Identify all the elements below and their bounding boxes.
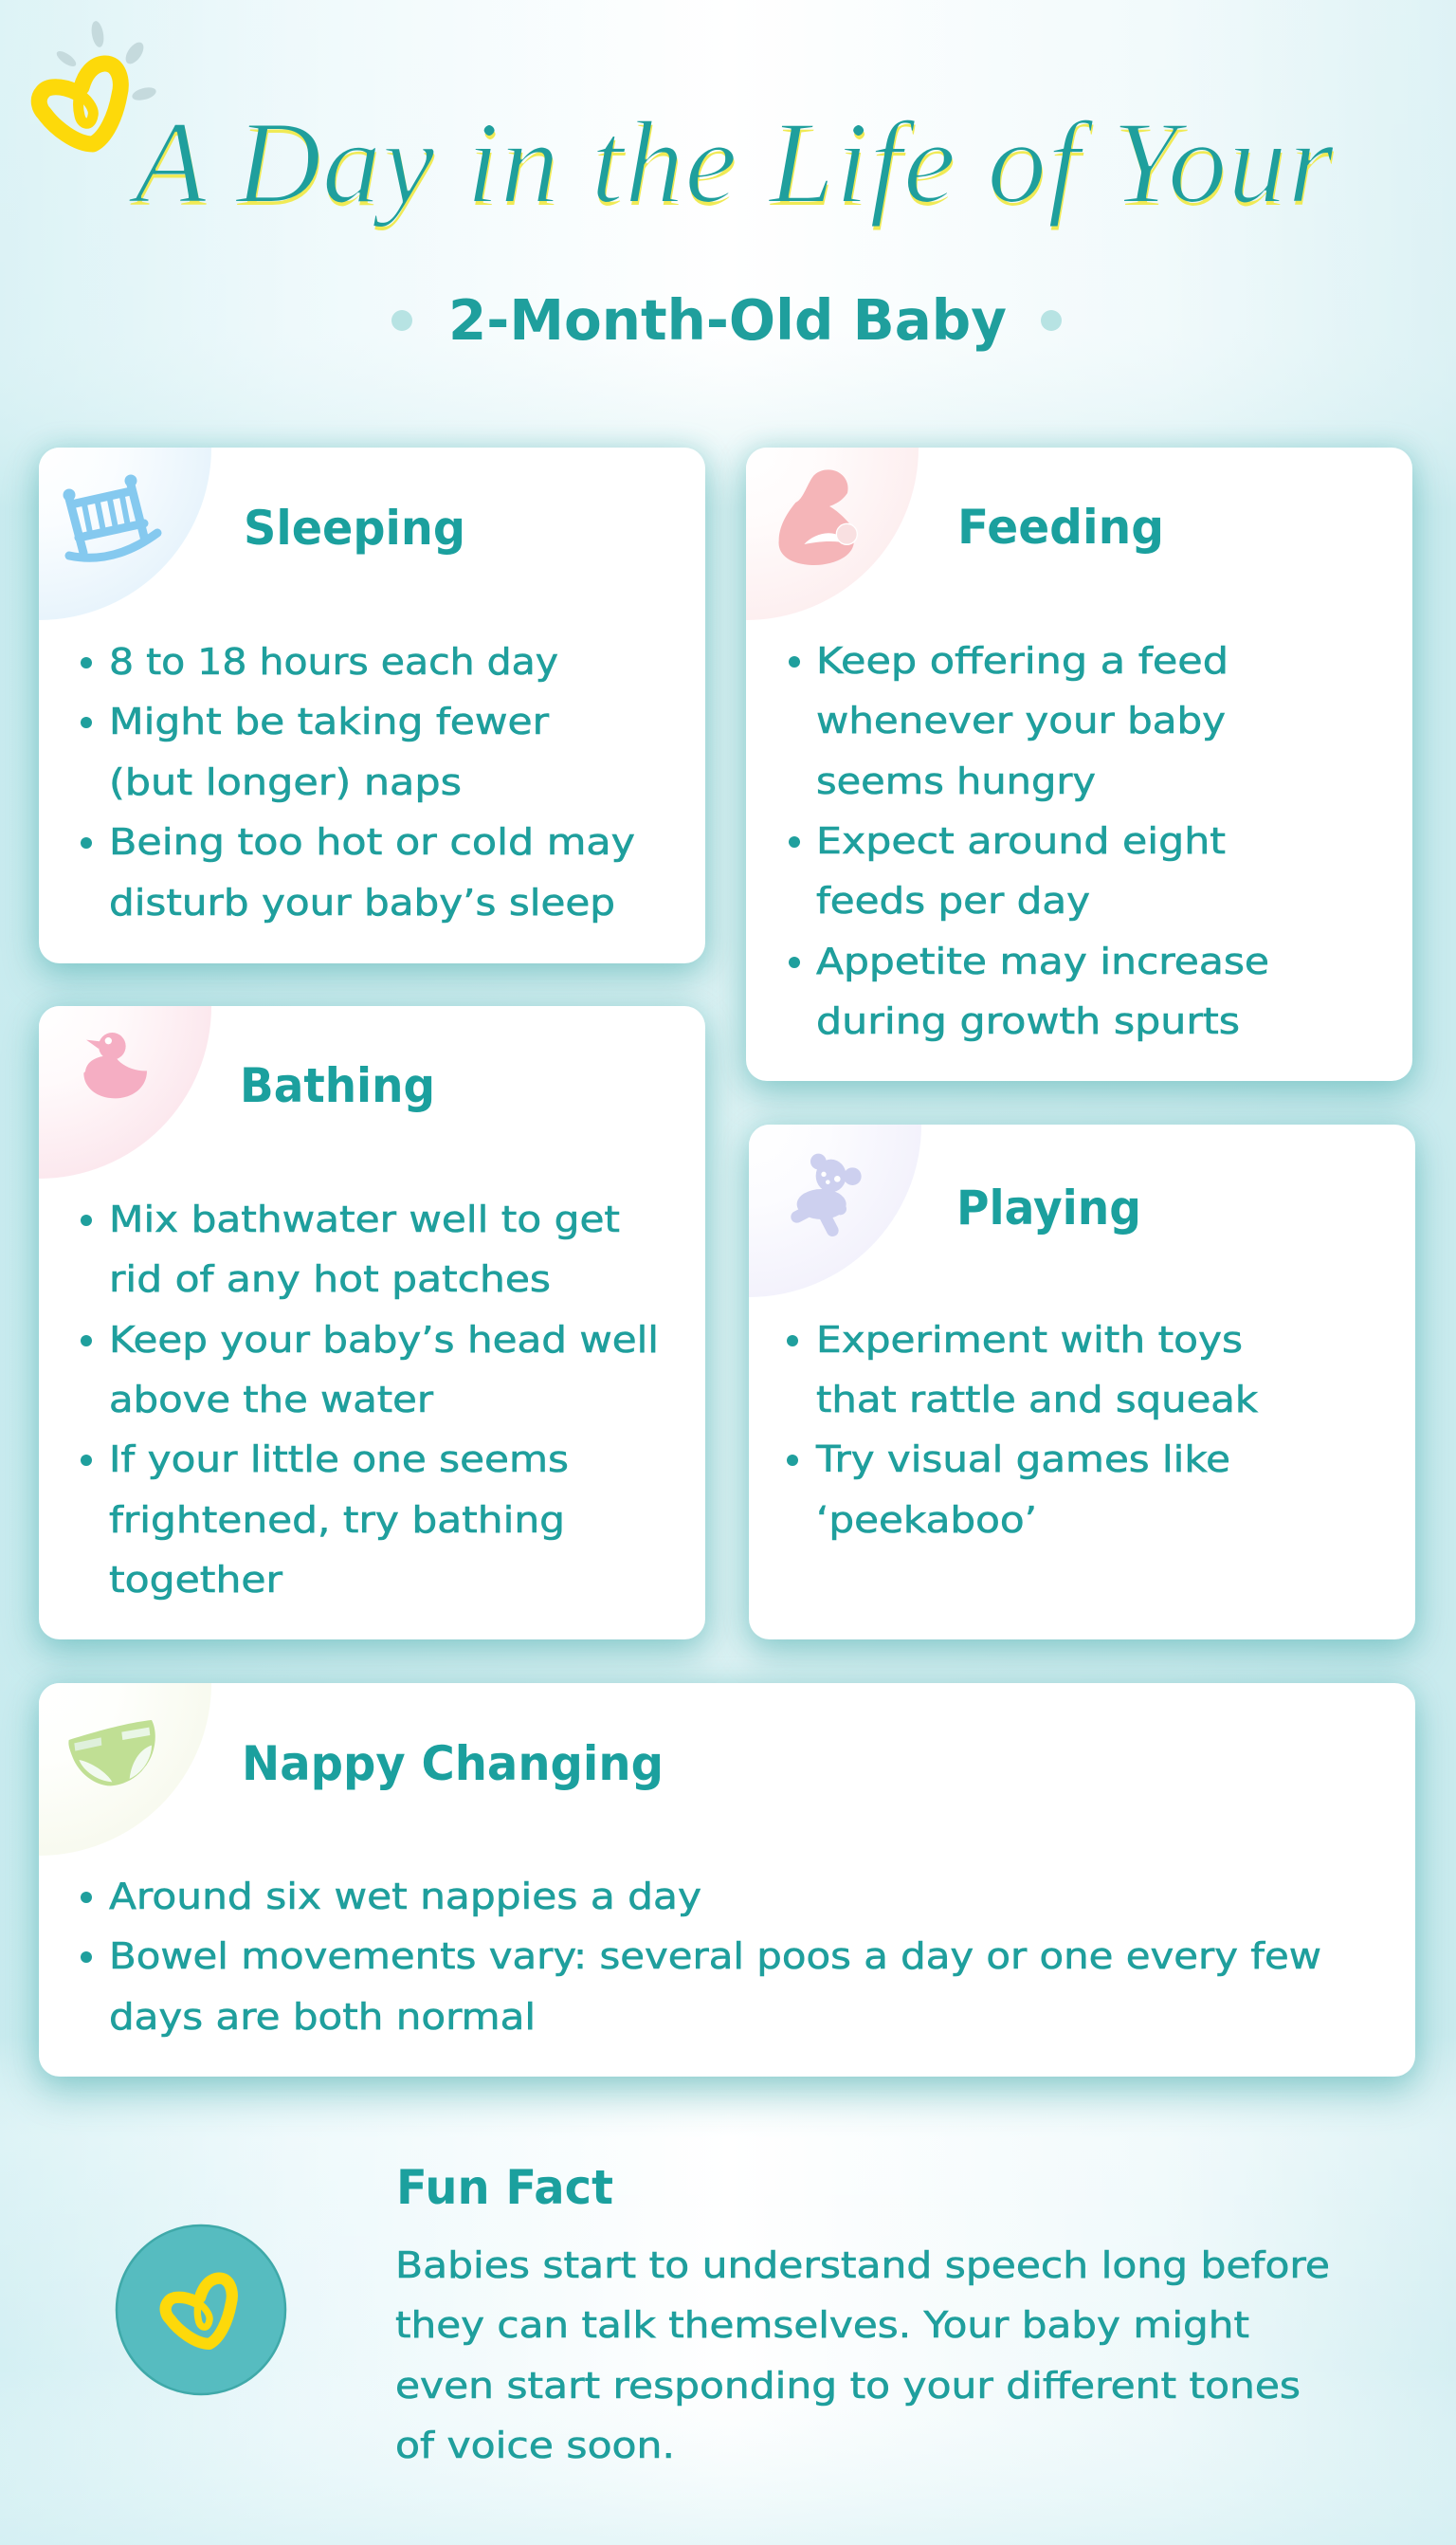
panel: playing [749,1125,1415,1639]
corner tint [746,448,919,620]
fun fact section [117,2160,1330,2466]
list: above the water [109,1379,433,1420]
heading: Sleeping [244,501,465,556]
list: whenever your baby [816,700,1226,742]
heading: Feeding [957,500,1164,555]
list: Expect around eight [816,820,1226,862]
body text: of voice soon. [395,2425,675,2466]
list: (but longer) naps [109,761,462,803]
body text: Babies start to understand speech long before [395,2244,1330,2286]
list: days are both normal [109,1996,536,2038]
heading: Nappy Changing [242,1736,664,1791]
list [81,1876,1321,2038]
card background [39,1683,1415,2077]
list: disturb your baby’s sleep [109,882,615,924]
card background [746,448,1412,1081]
list: Experiment with toys [816,1319,1243,1361]
body text: they can talk themselves. Your baby might [395,2304,1249,2346]
list: seems hungry [816,760,1096,802]
body text: even start responding to your different tones [395,2365,1301,2407]
corner tint [39,448,211,620]
list: Might be taking fewer [109,701,549,742]
list: ‘peekaboo’ [816,1499,1037,1541]
list: rid of any hot patches [109,1258,551,1300]
body text [395,2244,1330,2466]
list: 8 to 18 hours each day [109,641,558,683]
logo: yellow heart with rays [39,20,157,144]
list: Keep offering a feed [816,640,1228,682]
list: If your little one seems [109,1438,569,1480]
card background [749,1125,1415,1639]
icon: teddy bear [797,1154,862,1231]
list [81,641,635,924]
subtitle with dots: 2-Month-Old Baby [448,287,1007,353]
list: frightened, try bathing [109,1499,565,1541]
title: A Day in the Life of Your [128,98,1335,228]
list: feeds per day [816,880,1090,922]
card background [39,448,705,963]
icon: crib [64,476,157,558]
list: Being too hot or cold may [109,821,635,863]
list [789,640,1269,1042]
list: Try visual games like [815,1438,1230,1480]
corner tint [39,1006,211,1179]
icon: rubber duck [83,1033,147,1098]
list [81,1199,659,1601]
panel: sleeping [39,448,705,963]
list [787,1319,1258,1541]
list: during growth spurts [816,1000,1240,1042]
card background [39,1006,705,1639]
list: Bowel movements vary: several poos a day or one every few [109,1935,1321,1977]
list: Keep your baby’s head well [109,1319,659,1361]
corner tint [749,1125,921,1297]
list: Around six wet nappies a day [109,1876,701,1917]
panel: nappy changing [39,1683,1415,2077]
list: together [109,1559,282,1601]
heading: Bathing [240,1058,435,1113]
list: that rattle and squeak [816,1379,1258,1420]
icon: mother and baby [779,469,857,565]
heading: Playing [956,1181,1141,1236]
panel: feeding [746,448,1412,1081]
heading: Fun Fact [396,2160,613,2215]
corner tint [39,1683,211,1856]
panel: bathing [39,1006,705,1639]
list: Mix bathwater well to get [109,1199,620,1240]
list: Appetite may increase [816,941,1269,982]
icon: heart in circle [117,2225,285,2394]
icon: nappy [68,1720,155,1785]
